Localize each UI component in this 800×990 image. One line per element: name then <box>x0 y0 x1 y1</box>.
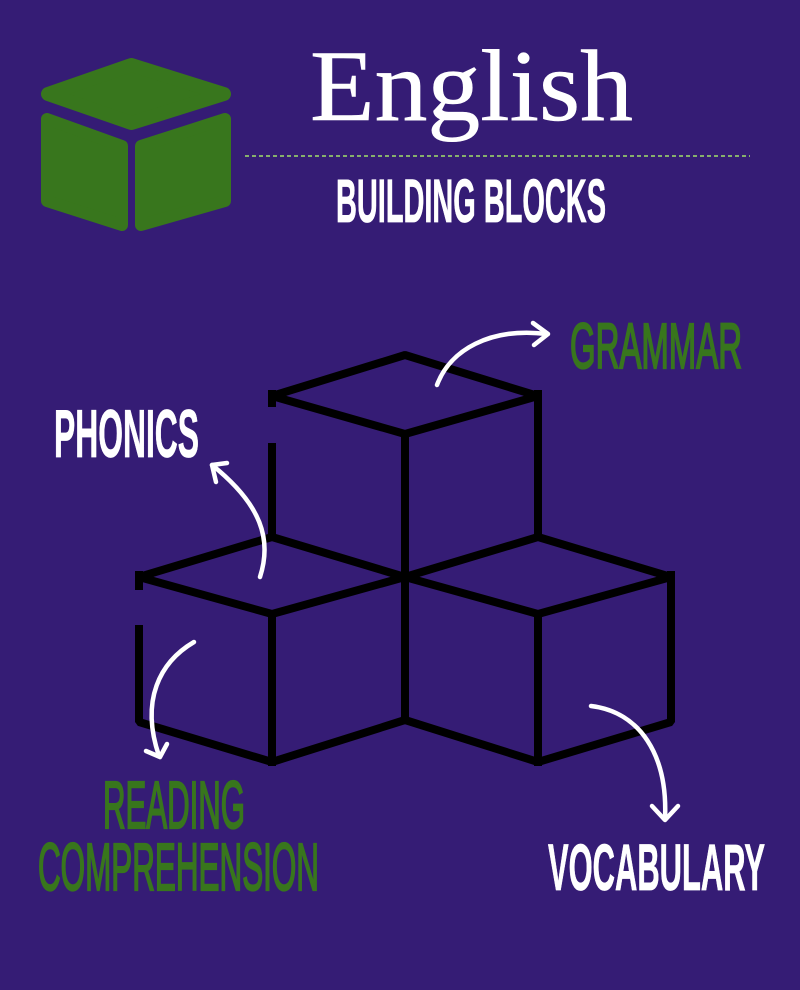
lower left block <box>139 537 405 766</box>
infographic canvas: PHONICS <box>54 396 199 472</box>
diagram: stacked building blocks <box>139 355 671 766</box>
top block <box>272 355 538 580</box>
lower right block <box>405 537 671 766</box>
arrow: to Vocabulary <box>591 706 678 820</box>
title: English: English <box>310 30 633 143</box>
dotted divider <box>245 155 750 157</box>
infographic canvas: COMPREHENSION <box>38 830 319 905</box>
label: Reading Comprehension: READING <box>103 768 245 843</box>
arrow: to Reading Comprehension <box>146 642 194 757</box>
arrow: to Grammar <box>437 323 548 385</box>
label: Reading Comprehension <box>38 768 319 905</box>
arrow: to Phonics <box>212 463 265 577</box>
icon: green cube logo <box>47 65 225 225</box>
